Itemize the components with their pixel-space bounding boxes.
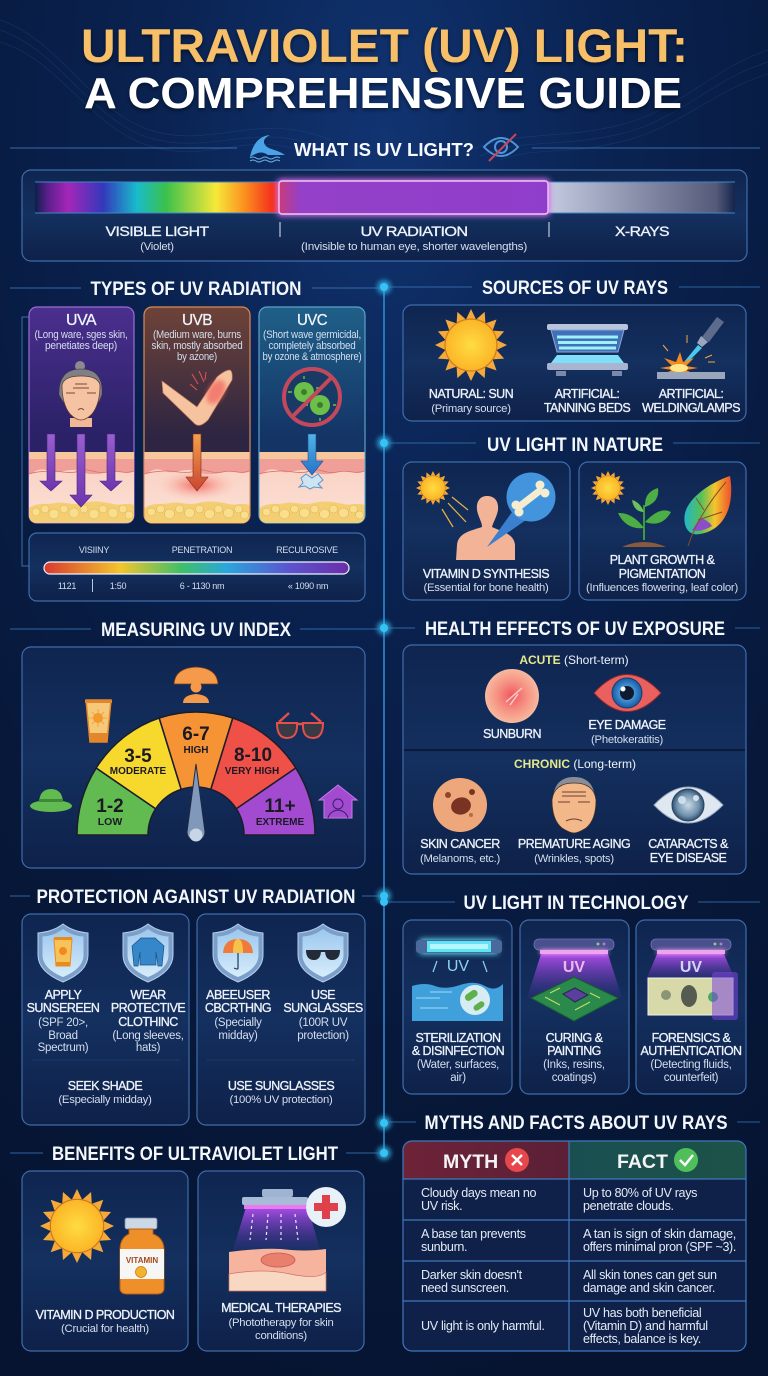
- label: x-rays: X-RAYS: [615, 223, 669, 239]
- gauge: very high: 8-10: [234, 745, 272, 766]
- label: sunglasses: protection): [297, 1030, 349, 1042]
- gauge: moderate: [96, 718, 181, 809]
- UV label: UV: [447, 958, 469, 975]
- row 2: A base tan prevents: [421, 1227, 526, 1241]
- bracket: [22, 317, 29, 566]
- heading: types of UV radiation: TYPES OF UV RADIATION: [90, 279, 302, 300]
- label: sunscreen: SUNSEREEN: [27, 1001, 100, 1015]
- gauge needle: [187, 764, 205, 842]
- icon: human figure: [456, 496, 515, 560]
- skin layers: [29, 452, 134, 523]
- icon: welding torch: [657, 317, 725, 379]
- label: forensics: FORENSICS &: [652, 1031, 732, 1045]
- label: premature aging: (Wrinkles, spots): [534, 853, 614, 865]
- label: sterilization: [412, 1031, 505, 1084]
- panel: wavelength scale: [29, 533, 365, 601]
- row 4: (Vitamin D) and harmful: [583, 1319, 708, 1333]
- label: clothing: (Long sleeves,: [112, 1030, 184, 1042]
- title: A COMPREHENSIVE GUIDE: [84, 69, 682, 118]
- label: sunscreen: Broad: [48, 1030, 78, 1042]
- label: seek shade: [58, 1079, 152, 1106]
- panel: UVB card: by azone): [177, 351, 217, 363]
- panel: UVA card: (Long ware, sges skin,: [34, 329, 128, 341]
- panel: wavelength scale: 1:50: [110, 581, 126, 591]
- icon: sun: [435, 309, 507, 381]
- label: natural sun: (Primary source): [431, 403, 511, 415]
- gauge: high: 6-7: [182, 724, 210, 745]
- row 1: [421, 1186, 697, 1213]
- label: medical therapies: [221, 1301, 341, 1342]
- panel: myths and facts table: [403, 1141, 746, 1351]
- label: UV radiation: [301, 223, 528, 253]
- icon: lamp: [651, 939, 731, 954]
- icon: umbrella person: [174, 667, 218, 703]
- row 2: sunburn.: [421, 1240, 467, 1254]
- x-ray band: [548, 182, 735, 213]
- heading: sources of UV rays: SOURCES OF UV RAYS: [482, 278, 668, 299]
- splash: [299, 474, 323, 489]
- icon: medical cross: [306, 1187, 346, 1227]
- label: tanning beds: [544, 387, 630, 415]
- light cone: [527, 954, 622, 998]
- gauge: extreme: 11+: [264, 796, 296, 817]
- arrows: deep penetration: [40, 434, 122, 507]
- panel: wavelength scale: RECULROSIVE: [276, 545, 338, 555]
- row 3: [421, 1268, 717, 1295]
- panel: wavelength scale: PENETRATION: [172, 545, 232, 555]
- label: left column text: [205, 988, 271, 1042]
- label: UV radiation: UV RADIATION: [360, 223, 468, 239]
- panel: wavelength scale: 1121: [58, 581, 76, 591]
- title: ULTRAVIOLET (UV) LIGHT:: [81, 19, 688, 72]
- label: curing: coatings): [552, 1072, 597, 1084]
- arrow: shallow penetration: [301, 434, 323, 475]
- panel: protection left: [22, 914, 189, 1125]
- label: sunscreen: APPLY: [45, 988, 83, 1002]
- label: use sunglasses: USE SUNGLASSES: [228, 1079, 334, 1093]
- label: tanning beds: ARTIFICIAL:: [555, 387, 619, 401]
- icon: sunburn: [485, 669, 539, 723]
- label: plant growth: PIGMENTATION: [619, 567, 706, 581]
- panel: UV index gauge: [22, 647, 365, 868]
- label: use sunglasses: [228, 1079, 334, 1106]
- bolts: [433, 961, 487, 972]
- panel: vitamin D production: [22, 1171, 188, 1351]
- panel: spectrum: [22, 170, 747, 261]
- icon: small sun: [416, 471, 450, 505]
- heading: health effects: HEALTH EFFECTS OF UV EXPOSURE: [425, 619, 725, 640]
- label: curing: [543, 1031, 605, 1084]
- gradient bar: [44, 562, 349, 574]
- label: tanning beds: TANNING BEDS: [544, 401, 630, 415]
- icon: water and microbes: [412, 983, 503, 1021]
- label: cataracts: CATARACTS &: [648, 837, 729, 851]
- label: left column text: CBCRTHNG: [205, 1001, 271, 1015]
- panel: UVC card: completely absorbed: [268, 340, 356, 352]
- icon: bone: [506, 472, 556, 522]
- label: sterilization: STERILIZATION: [416, 1031, 501, 1045]
- visible light band: [35, 182, 280, 213]
- panel: wavelength scale: VISIINY: [79, 545, 109, 555]
- panel: UVB card: [144, 307, 250, 523]
- label: left column text: ABEEUSER: [206, 988, 270, 1002]
- panel: curing: [520, 920, 629, 1094]
- label: medical therapies: MEDICAL THERAPIES: [221, 1301, 341, 1315]
- row 1: penetrate clouds.: [583, 1199, 674, 1213]
- table grid: [403, 1141, 746, 1351]
- row 2: A tan is sign of skin damage,: [583, 1227, 736, 1241]
- label: medical therapies: conditions): [255, 1330, 307, 1342]
- label: sterilization: & DISINFECTION: [412, 1044, 505, 1058]
- label: plant growth: [586, 553, 738, 594]
- arrow: medium penetration: [186, 434, 208, 491]
- icon: red eye: [594, 674, 661, 712]
- gauge: moderate: 3-5: [124, 746, 152, 767]
- label: premature aging: PREMATURE AGING: [518, 837, 630, 851]
- icon: UV tube: [416, 939, 502, 954]
- gauge: high: HIGH: [184, 745, 208, 756]
- gauge: low: LOW: [98, 816, 122, 828]
- label: plant growth: PLANT GROWTH &: [610, 553, 715, 567]
- icon: sunscreen: [85, 700, 112, 742]
- label: forensics: (Detecting fluids,: [650, 1059, 732, 1071]
- label: sunscreen: (SPF 20>,: [38, 1017, 88, 1029]
- sun rays arrows: [442, 497, 468, 527]
- icon: hat: [30, 789, 72, 812]
- label: welding lamps: [642, 387, 740, 415]
- icon: skin cancer: [433, 778, 487, 832]
- myth header: MYTH: [443, 1151, 498, 1173]
- panel: UVA card: UVA: [66, 312, 97, 329]
- heading: UV light in nature: UV LIGHT IN NATURE: [487, 435, 663, 456]
- panel: forensics: [636, 920, 746, 1094]
- panel: UVC card: [259, 307, 365, 523]
- label: vitamin D production: (Crucial for health): [61, 1323, 149, 1335]
- label: sunglasses: (100R UV: [299, 1017, 348, 1029]
- icon: pointer to bone: [487, 512, 526, 547]
- icon: old woman face: [59, 361, 102, 427]
- gauge: extreme: [236, 768, 315, 835]
- label: sterilization: (Water, surfaces,: [417, 1059, 499, 1071]
- panel: UVB card: skin, mostly absorbed: [152, 340, 242, 352]
- icon: clothing shield: [123, 924, 173, 982]
- label: sunglasses: SUNGLASSES: [283, 1001, 363, 1015]
- gauge: low: [77, 768, 156, 835]
- label: sterilization: air): [450, 1072, 466, 1084]
- label: visible light: (Violet): [140, 241, 174, 253]
- row 4: UV light is only harmful.: [421, 1319, 545, 1333]
- panel: vitamin D synthesis: [403, 462, 570, 600]
- burn glow: [157, 469, 237, 501]
- icon: phototherapy lamp: [233, 1189, 320, 1250]
- icon: aging face: [552, 777, 596, 833]
- label: curing: CURING &: [546, 1031, 604, 1045]
- label: left column text: midday): [218, 1030, 258, 1042]
- label: plant growth: (Influences flowering, leaf color): [586, 582, 738, 594]
- panel: UVB card: UVB: [182, 312, 212, 329]
- label: premature aging: [518, 837, 630, 865]
- label: vitamin D: (Essential for bone health): [423, 582, 549, 594]
- label: use sunglasses: (100% UV protection): [230, 1094, 333, 1106]
- label: sunglasses: USE: [311, 988, 335, 1002]
- label: skin cancer: (Melanoms, etc.): [420, 853, 501, 865]
- panel: UVC card: (Short wave germicidal,: [263, 329, 361, 341]
- label: skin cancer: [420, 837, 501, 865]
- panel: wavelength scale: « 1090 nm: [288, 581, 328, 591]
- label: forensics: AUTHENTICATION: [640, 1044, 742, 1058]
- title: [81, 19, 688, 118]
- myth header: [403, 1141, 569, 1179]
- row 3: All skin tones can get sun: [583, 1268, 717, 1282]
- skin layers: [144, 452, 250, 523]
- skin layers: [260, 452, 364, 523]
- row 1: Up to 80% of UV rays: [583, 1186, 697, 1200]
- gauge: extreme: EXTREME: [256, 817, 304, 828]
- label: forensics: [640, 1031, 742, 1084]
- icon: sun: [40, 1189, 114, 1263]
- icon: vitamin bottle: VITAMIN: [126, 1256, 158, 1265]
- light cone: [645, 954, 736, 982]
- panel: plant growth: [579, 462, 746, 600]
- fact header: FACT: [617, 1151, 668, 1173]
- label: vitamin D production: [36, 1308, 175, 1335]
- label: left column text: (Specially: [214, 1017, 262, 1029]
- central timeline: [377, 280, 391, 1160]
- row 4: [421, 1306, 708, 1346]
- label: clothing: hats): [136, 1042, 161, 1054]
- label: cataracts: [648, 837, 729, 865]
- label: seek shade: (Especially midday): [58, 1094, 152, 1106]
- panel: protection right: [197, 914, 365, 1125]
- row 3: need sunscreen.: [421, 1281, 509, 1295]
- panel: medical therapies: [198, 1171, 364, 1351]
- row 2: offers minimal pron (SPF ~3).: [583, 1240, 736, 1254]
- panel: UVB card: (Medium ware, burns: [153, 329, 242, 341]
- icon: sunglasses shield: [298, 924, 348, 982]
- icon: sprout: [618, 488, 671, 547]
- panel: health effects: [403, 645, 746, 874]
- icon: lamp: [534, 939, 614, 954]
- label: sunburn: SUNBURN: [483, 727, 541, 741]
- label: welding lamps: WELDING/LAMPS: [642, 401, 740, 415]
- label: clothing: [111, 988, 185, 1054]
- gauge: very high: VERY HIGH: [225, 766, 279, 777]
- panel: UVA card: penetiates deep): [45, 340, 117, 352]
- label: seek shade: SEEK SHADE: [68, 1079, 142, 1093]
- panel: UVC card: by ozone & atmosphere): [262, 351, 362, 363]
- gauge: very high: [211, 718, 296, 809]
- label: visible light: VISIBLE LIGHT: [106, 223, 210, 239]
- label: clothing: WEAR: [130, 988, 166, 1002]
- icon: burned arm: [162, 370, 232, 425]
- icon: crossed eye: [484, 134, 518, 161]
- panel: sterilization: [403, 920, 512, 1094]
- icon: no germs: [284, 369, 340, 425]
- heading: what is UV light: [10, 134, 760, 162]
- row 2: [421, 1227, 736, 1254]
- panel: UVA card: [29, 307, 134, 523]
- icon: skin lesion: [229, 1249, 326, 1291]
- heading: measuring UV index: MEASURING UV INDEX: [101, 620, 291, 641]
- label: curing: (Inks, resins,: [543, 1059, 605, 1071]
- label: natural sun: [429, 387, 514, 415]
- row 1: UV risk.: [421, 1199, 462, 1213]
- subheading: chronic: CHRONIC (Long-term): [514, 757, 636, 771]
- gauge: moderate: MODERATE: [110, 766, 167, 777]
- label: natural sun: NATURAL: SUN: [429, 387, 514, 401]
- gauge: high: [159, 712, 233, 789]
- icon: banknote: [648, 972, 738, 1020]
- label: eye damage: (Phetokeratitis): [591, 734, 663, 746]
- label: forensics: counterfeit): [664, 1072, 719, 1084]
- icon: circuit board: [531, 977, 618, 1021]
- UV band glow: [277, 179, 550, 216]
- label: medical therapies: (Phototherapy for skin: [228, 1317, 334, 1329]
- label: vitamin D: VITAMIN D SYNTHESIS: [423, 567, 549, 581]
- panel: UVC card: UVC: [297, 312, 327, 329]
- heading: technology: UV LIGHT IN TECHNOLOGY: [464, 893, 689, 914]
- heading: benefits: BENEFITS OF ULTRAVIOLET LIGHT: [52, 1144, 338, 1165]
- UV label: UV: [680, 959, 702, 976]
- heading: protection: PROTECTION AGAINST UV RADIATION: [36, 887, 356, 908]
- icon: umbrella shield: [213, 924, 263, 982]
- heading: myths and facts: MYTHS AND FACTS ABOUT UV RAYS: [424, 1113, 728, 1134]
- label: cataracts: EYE DISEASE: [650, 851, 727, 865]
- label: UV radiation: (Invisible to human eye, shorter wavelengths): [301, 241, 528, 253]
- icon: house: [319, 785, 357, 818]
- UV band: [279, 181, 548, 214]
- icon: small sun: [591, 471, 625, 505]
- row 3: Darker skin doesn't: [421, 1268, 523, 1282]
- row 1: Cloudy days mean no: [421, 1186, 537, 1200]
- fact header: [569, 1141, 746, 1179]
- icon: sunglasses: [277, 713, 323, 738]
- panel: wavelength scale: 6 - 1130 nm: [180, 581, 224, 591]
- label: skin cancer: SKIN CANCER: [420, 837, 500, 851]
- label: clothing: CLOTHINC: [118, 1015, 178, 1029]
- UV label: UV: [563, 959, 585, 976]
- label: sunscreen: Spectrum): [38, 1042, 89, 1054]
- label: vitamin D: [423, 567, 549, 594]
- icon: rainbow leaf: [684, 476, 731, 546]
- label: clothing: PROTECTIVE: [111, 1001, 185, 1015]
- label: sunscreen: [27, 988, 100, 1054]
- icon: tanning bed: [547, 324, 628, 376]
- label: welding lamps: ARTIFICIAL:: [659, 387, 723, 401]
- label: sunglasses: [283, 988, 363, 1042]
- label: eye damage: [588, 718, 666, 746]
- row 4: effects, balance is key.: [583, 1332, 701, 1346]
- gauge: low: 1-2: [96, 796, 124, 817]
- icon: cataract eye: [654, 787, 723, 823]
- icon: wave: [250, 135, 285, 162]
- heading: what is UV light: WHAT IS UV LIGHT?: [294, 139, 474, 160]
- label: visible light: [106, 223, 210, 253]
- icon: vitamin bottle: [120, 1218, 164, 1294]
- panel: sources: [403, 305, 746, 421]
- icon: sunscreen shield: [38, 924, 88, 982]
- row 3: damage and skin cancer.: [583, 1281, 715, 1295]
- row 4: UV has both beneficial: [583, 1306, 701, 1320]
- label: curing: PAINTING: [547, 1044, 601, 1058]
- label: vitamin D production: VITAMIN D PRODUCTION: [36, 1308, 175, 1322]
- subheading: acute: ACUTE (Short-term): [519, 653, 629, 667]
- label: eye damage: EYE DAMAGE: [588, 718, 666, 732]
